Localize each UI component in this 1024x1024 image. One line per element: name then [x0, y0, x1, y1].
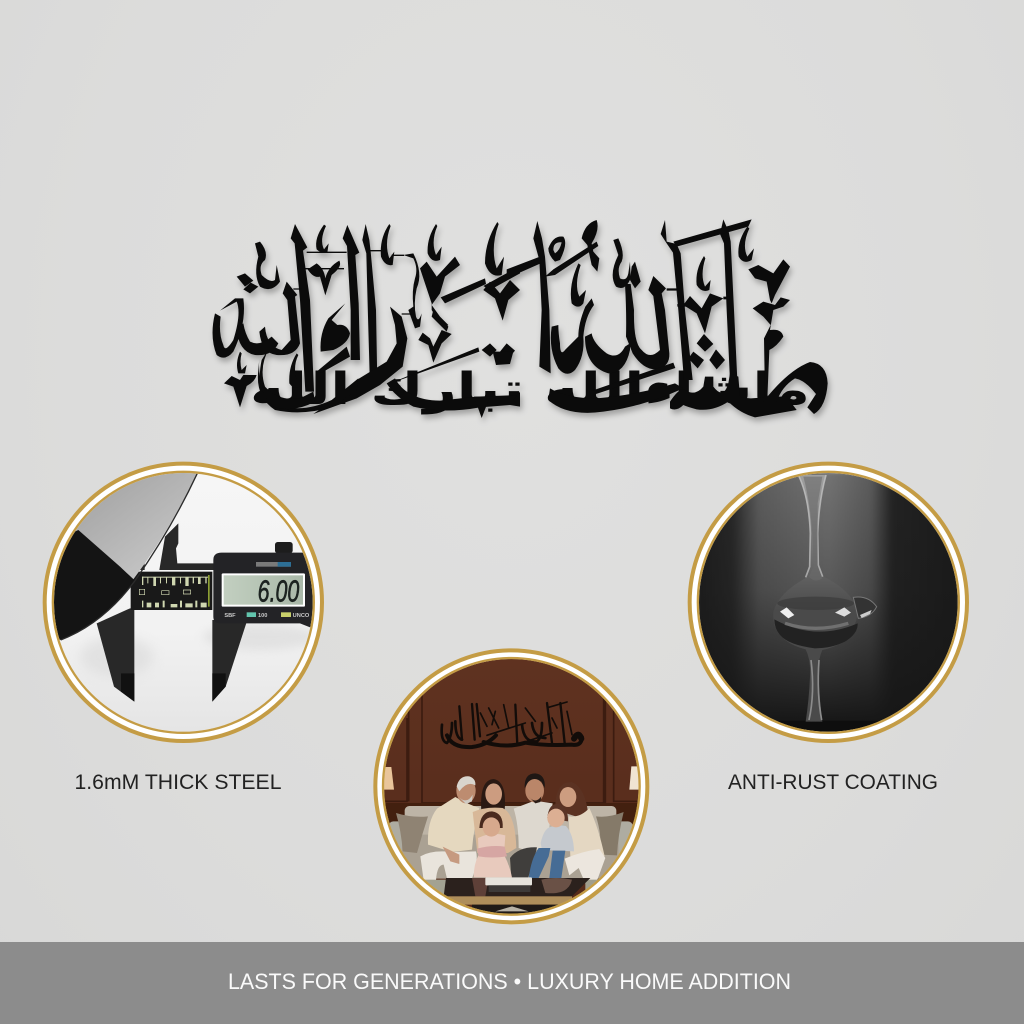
caption: steel thickness: 1.6mM THICK STEEL [74, 771, 282, 794]
panel: steel thickness caliper photo: 6.00 [258, 575, 299, 609]
calligraphy inscription: ماشاءالله تبارك الله [250, 364, 810, 415]
caption: anti-rust coating: ANTI-RUST COATING [728, 771, 938, 794]
panel: steel thickness caliper photo [45, 464, 322, 741]
caliper ruler [131, 572, 212, 610]
left half of artwork [213, 222, 520, 418]
digital caliper display [275, 542, 293, 553]
right half of artwork [507, 219, 828, 417]
panel: family in living room photo [375, 650, 647, 922]
lamps [384, 767, 394, 790]
caliper jaws [97, 522, 247, 702]
coffee table [425, 880, 446, 894]
wood panelling [385, 695, 639, 803]
wall art: Masha Allah Tabarak Allah calligraphy [213, 219, 828, 418]
panel: steel thickness caliper photo: SBF [224, 613, 236, 619]
sofa [405, 806, 616, 836]
mini calligraphy on the wall [442, 702, 582, 747]
steel sheet sample [75, 473, 196, 580]
boy on lap [529, 804, 574, 878]
panel: anti-rust coating droplet photo [690, 464, 967, 741]
bottom banner [0, 942, 1024, 1024]
mother [473, 779, 516, 853]
mother right [555, 782, 605, 883]
oil droplet and stream [773, 475, 877, 722]
gold ring frame [375, 650, 647, 922]
gold ring frame [690, 464, 967, 741]
banner text: LASTS FOR GENERATIONS • LUXURY HOME ADDITION [228, 969, 791, 994]
father [510, 773, 553, 878]
panel: steel thickness caliper photo: UNCO [293, 613, 310, 619]
panel: steel thickness caliper photo: 100 [258, 613, 267, 619]
girl in pink dress [474, 811, 512, 877]
grandfather [420, 776, 479, 880]
gold ring frame [45, 464, 322, 741]
